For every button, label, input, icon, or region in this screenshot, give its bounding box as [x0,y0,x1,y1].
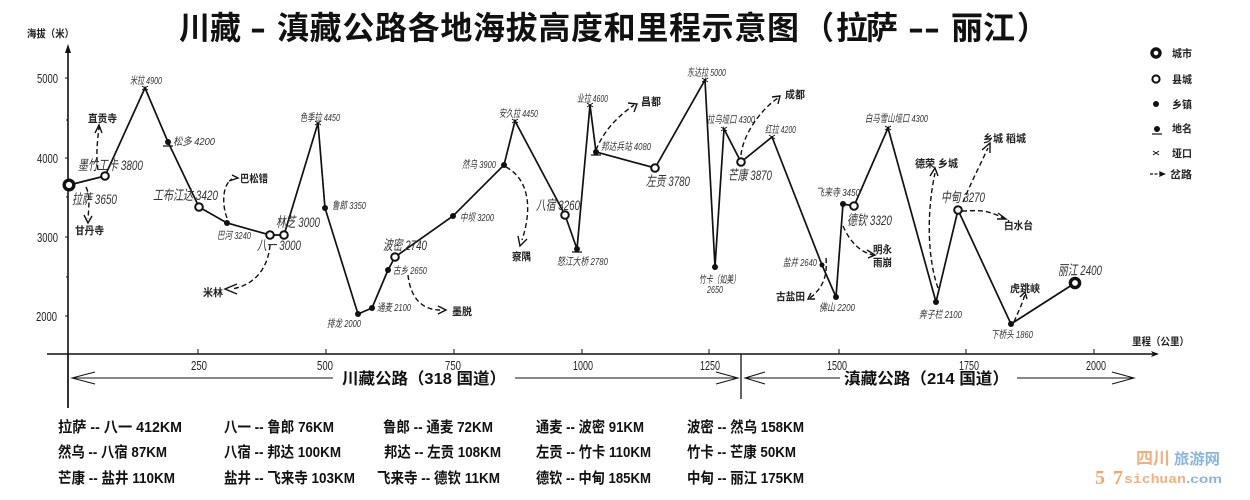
legend: 城市 [1172,47,1192,60]
place labels: 丽江 2400 [1058,262,1102,278]
place labels: 2650 [706,284,723,296]
y axis: 4000 [37,151,58,166]
place labels: 竹卡（如美） [699,274,740,286]
branch destination labels: 甘丹寺 [75,224,104,237]
pass labels: 红拉 4200 [765,124,796,136]
title: （ [804,10,834,46]
legend: 地名 [1172,122,1192,135]
watermark: 旅游网 [1174,450,1220,468]
x axis: 里程（公里） [1132,335,1189,348]
mileage table: 中甸 -- 丽江 175KM [687,470,804,487]
pass labels: 拉乌垭口 4300 [707,114,755,126]
y axis [27,27,74,408]
x axis: 1250 [700,358,720,373]
mileage table: 邦达 -- 左贡 108KM [384,444,501,461]
place labels: 林芝 3000 [276,214,320,230]
county markers [101,158,962,261]
place labels: 芒康 3870 [728,167,772,183]
mileage table: 飞来寺 -- 德钦 11KM [377,469,500,487]
place labels: 邦达兵站 4080 [601,141,651,153]
legend: 岔路 [1170,168,1193,181]
place labels: 通麦 2100 [377,302,411,314]
pass labels: 白马雪山垭口 4300 [865,113,928,125]
place labels: 佛山 2200 [819,302,855,314]
pass labels [130,67,928,136]
branch destination labels: 巴松错 [240,172,268,185]
mileage table: 左贡 -- 竹卡 110KM [536,444,651,461]
place labels: 奔子栏 2100 [919,309,962,321]
mileage table: 通麦 -- 波密 91KM [536,418,644,436]
place labels: 德钦 3320 [847,212,892,228]
pass labels: 业拉 4600 [577,93,608,105]
x axis: 1500 [827,358,847,373]
mileage table: 盐井 -- 飞来寺 103KM [224,470,355,487]
mileage table: 鲁郎 -- 通麦 72KM [383,418,493,436]
mileage table: 德钦 -- 中甸 185KM [536,469,651,487]
mileage table: 竹卡 -- 芒康 50KM [687,443,796,461]
title: 丽江 [951,10,1015,46]
mileage table [58,418,804,487]
title: 川藏 [179,10,241,46]
place labels: 工布江达 3420 [153,187,218,203]
city markers [64,180,1080,288]
mileage table: 波密 -- 然乌 158KM [687,418,804,436]
Sichuan-Tibet road span: 川藏公路（318 国道） [342,369,506,388]
title: 拉萨 [836,10,898,46]
branch destination labels: 雨崩 [873,256,892,269]
branch destination labels: 察隅 [512,250,531,263]
place labels: 拉萨 3650 [72,191,117,207]
x axis: 750 [445,358,461,373]
mileage table: 八一 -- 鲁郎 76KM [224,418,334,436]
place labels: 中坝 3200 [460,212,494,224]
title: -- [908,10,940,46]
branch destination labels: 德荣 乡城 [915,157,958,170]
branch destination labels: 昌都 [641,95,661,108]
branch destination labels: 虎跳峡 [1010,282,1040,295]
place labels: 八宿 3260 [536,197,580,213]
y axis: 2000 [36,309,57,324]
x axis: 2000 [1086,358,1106,373]
place labels: 鲁郎 3350 [332,200,366,212]
branch destination labels: 白水台 [1004,219,1033,232]
legend: 县城 [1172,73,1192,86]
watermark: 四川 [1136,449,1170,468]
x axis: 500 [317,358,333,373]
branch destination labels: 成都 [785,88,805,101]
branch destination labels: 墨脱 [452,305,472,318]
y axis: 海拔（米） [27,27,74,40]
branch destination labels: 古盐田 [776,290,805,303]
Yunnan-Tibet road span [745,369,1134,388]
x axis: 1000 [573,358,593,373]
branch road arrows [84,96,1027,322]
place labels [72,136,1102,341]
legend [1150,47,1193,181]
elevation route line [69,80,1075,324]
title: 滇藏公路各地海拔高度和里程示意图 [277,10,799,46]
branch destination labels: 米林 [203,286,223,299]
branch destination labels [75,88,1040,318]
place labels: 怒江大桥 2780 [557,256,608,268]
town markers [163,139,1014,327]
branch destination labels: 明永 [873,243,892,256]
place labels: 左贡 3780 [646,173,690,189]
branch destination labels: 乡城 稻城 [983,132,1026,145]
place labels: 然乌 3900 [462,159,496,171]
legend: 垭口 [1172,147,1192,160]
place labels: 排龙 2000 [327,318,361,330]
legend: 乡镇 [1172,98,1192,111]
title: ） [1017,10,1047,46]
pass labels: 安久拉 4450 [499,108,538,120]
title [179,10,1047,46]
pass labels: 色季拉 4450 [300,112,340,124]
watermark: 57 [1095,467,1123,489]
place labels: 中甸 3270 [941,189,985,205]
pass labels: 米拉 4900 [130,75,162,87]
mileage table: 芒康 -- 盐井 110KM [58,469,175,487]
watermark: sichuan [1124,472,1186,487]
Yunnan-Tibet road span: 滇藏公路（214 国道） [844,369,1009,388]
x axis: 1750 [959,358,979,373]
y axis: 3000 [37,230,58,245]
watermark [1095,449,1222,489]
place labels: 下桥头 1860 [991,329,1033,341]
Sichuan-Tibet road span [68,354,741,408]
place labels: 八一 3000 [257,237,301,253]
place labels: 松多 4200 [173,136,215,148]
place labels: 古乡 2650 [393,265,427,277]
x axis: 250 [191,358,207,373]
branch destination labels: 直贡寺 [88,112,117,125]
mileage table: 八宿 -- 邦达 100KM [224,443,341,461]
place labels: 墨竹工卡 3800 [78,157,143,173]
title: - [250,10,266,46]
place labels: 盐井 2640 [783,257,817,269]
x axis [47,335,1189,373]
pass labels: 东达拉 5000 [687,67,726,79]
mileage table: 然乌 -- 八宿 87KM [58,443,167,461]
place labels: 飞来寺 3450 [816,187,860,199]
pass markers [142,78,891,139]
place labels: 巴河 3240 [217,230,251,242]
y axis: 5000 [37,71,58,86]
watermark: .com [1186,472,1222,486]
place labels: 波密 2740 [383,237,427,253]
mileage table: 拉萨 -- 八一 412KM [58,418,182,436]
